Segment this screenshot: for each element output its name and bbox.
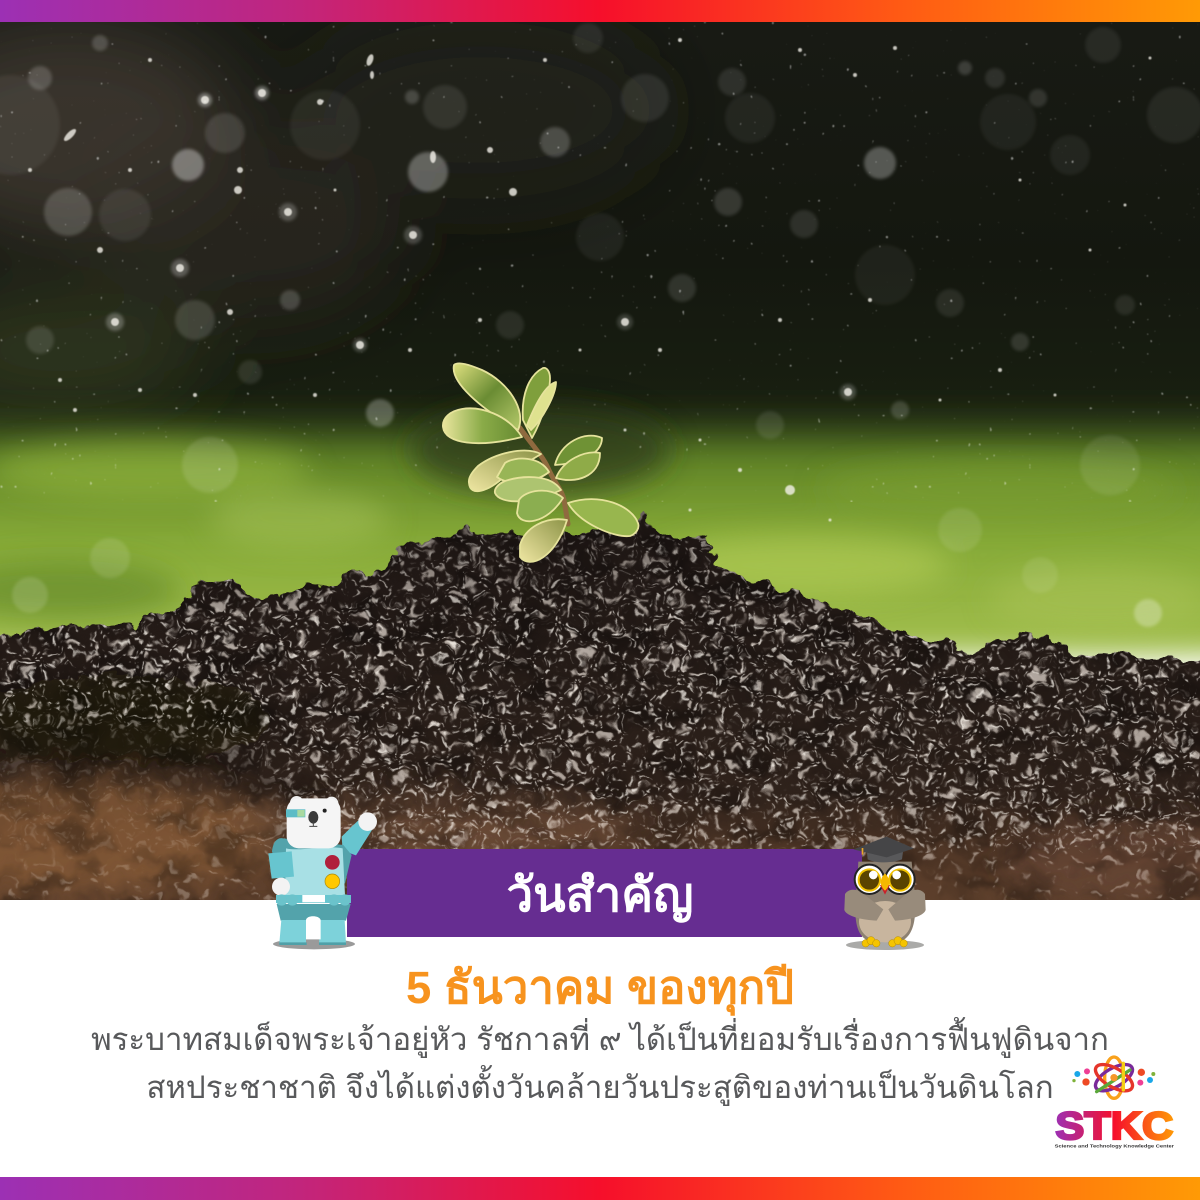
STKC logo [1055,1057,1174,1148]
logo wordmark: STKC [1055,1104,1173,1148]
logo atom symbol [1072,1057,1155,1098]
logo tagline: Science and Technology Knowledge Center [1055,1143,1174,1148]
date: 5 ธันวาคม ของทุกปี: 5 ธันวาคม ของทุกปี [406,962,794,1013]
body text: สหประชาชาติ จึงได้แต่งตั้งวันคล้ายวันประสูติของท่านเป็นวันดินโลก [146,1070,1054,1105]
purple heading banner [347,849,862,937]
falling water droplets [28,38,1152,522]
body text [91,1017,1109,1106]
heading: วันสำคัญ: วันสำคัญ [506,869,694,922]
bokeh water circles [0,23,1200,627]
body text: พระบาทสมเด็จพระเจ้าอยู่หัว รัชกาลที่ ๙ ได้เป็นที่ยอมรับเรื่องการฟื้นฟูดินจาก [91,1022,1109,1057]
stem [520,428,568,524]
bottom gradient bar [0,1177,1200,1200]
seedling with variegated leaves [443,363,639,562]
top gradient bar [0,0,1200,22]
mound of wet soil [0,510,1200,930]
mascot: polar bear robot [268,796,377,949]
leaves [443,363,639,562]
blurred dark background [0,20,1200,502]
fine rain speckles [0,22,1200,502]
mascot: owl with graduation cap [844,837,926,950]
blurred green grass band [0,405,1200,655]
